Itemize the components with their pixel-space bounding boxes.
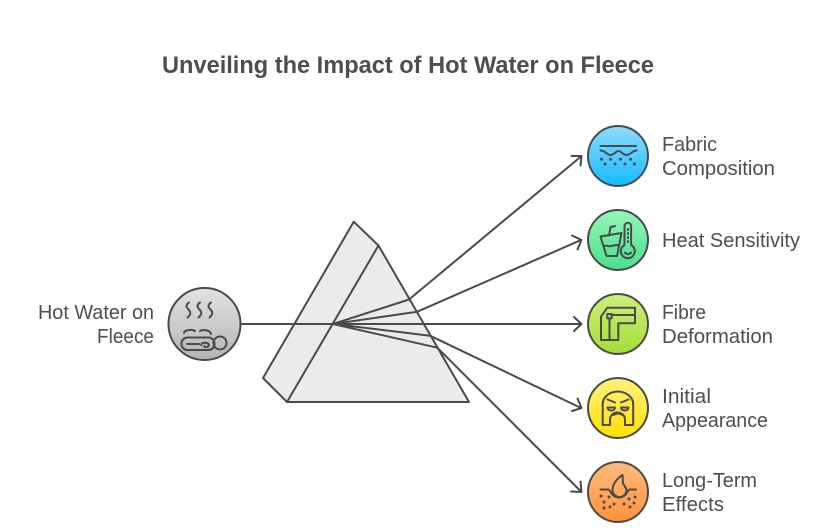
icon: fibre deformation <box>588 294 648 354</box>
label: initial appearance: Appearance <box>662 410 768 432</box>
label: heat sensitivity: Heat Sensitivity <box>662 230 800 252</box>
title: Unveiling the Impact of Hot Water on Fleece <box>162 52 654 79</box>
label: initial appearance <box>662 386 768 432</box>
label: fibre deformation: Deformation <box>662 326 773 348</box>
label: fibre deformation <box>662 302 773 348</box>
arrow: to Heat Sensitivity <box>333 236 582 324</box>
label: long-term effects: Long-Term <box>662 470 757 492</box>
label: long-term effects <box>662 470 757 516</box>
label: long-term effects: Effects <box>662 494 724 516</box>
source label: Fleece <box>97 326 154 348</box>
arrow: to Long-Term Effects <box>333 324 582 492</box>
arrow: to Fabric Composition <box>333 156 582 324</box>
source label <box>38 302 154 348</box>
icon: long-term effects <box>588 462 648 522</box>
icon: initial appearance <box>588 378 648 438</box>
arrow: to Fibre Deformation <box>333 317 582 331</box>
icon: fabric composition <box>588 126 648 186</box>
arrow: to Initial Appearance <box>333 324 582 411</box>
label: fibre deformation: Fibre <box>662 302 706 324</box>
icon: heat sensitivity <box>588 210 648 270</box>
label: fabric composition <box>662 134 775 180</box>
label: initial appearance: Initial <box>662 386 711 408</box>
source label: Hot Water on <box>38 302 154 324</box>
prism <box>263 222 469 402</box>
label: fabric composition: Composition <box>662 158 775 180</box>
label: fabric composition: Fabric <box>662 134 717 156</box>
incoming ray <box>241 323 333 325</box>
icon: hot water on fleece <box>168 288 240 360</box>
